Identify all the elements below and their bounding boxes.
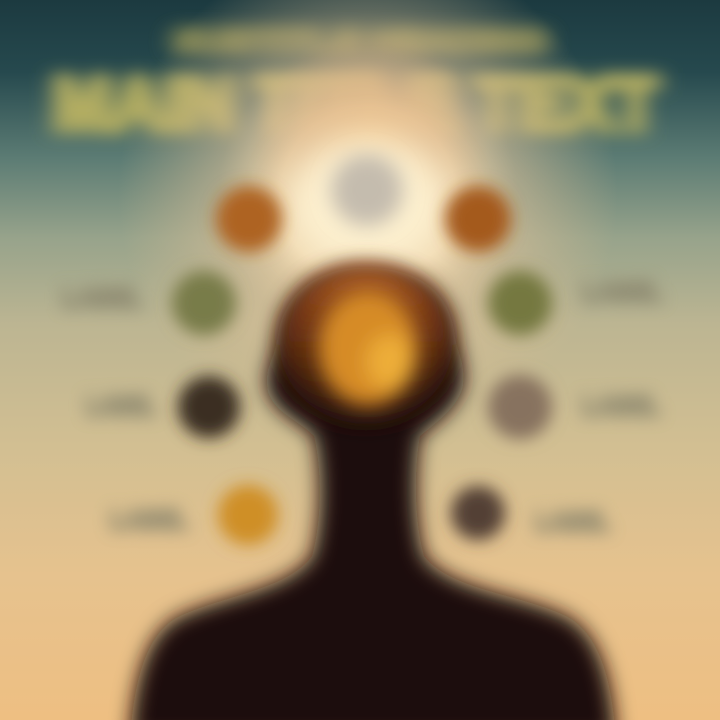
mauve circle right <box>488 375 552 439</box>
green circle left <box>172 271 236 335</box>
dark circle left <box>178 376 240 438</box>
head and shoulders silhouette <box>130 268 616 720</box>
orange circle right <box>445 186 511 252</box>
label: upper right: LABEL <box>582 276 662 307</box>
green circle right <box>488 271 552 335</box>
cream halo behind top circle <box>283 137 453 273</box>
label: lower left: LABEL <box>110 504 188 535</box>
blurred side labels <box>62 276 662 537</box>
dark circle right <box>451 486 505 540</box>
subtitle heading: SUBTITLE HEADING <box>172 23 548 59</box>
orange circle left <box>216 186 282 252</box>
white top circle <box>331 154 403 226</box>
label: upper left: LABEL <box>62 282 142 313</box>
label: middle left: LABEL <box>86 390 156 421</box>
glow peak over title <box>250 30 490 270</box>
main title: MAIN TITLE TEXT <box>52 62 658 147</box>
label: middle right: LABEL <box>582 390 660 421</box>
head warm inner fill <box>280 264 452 424</box>
gold circle left <box>218 485 278 545</box>
central glow <box>118 0 618 445</box>
label: lower right: LABEL <box>535 506 610 537</box>
brain glow <box>318 290 418 406</box>
